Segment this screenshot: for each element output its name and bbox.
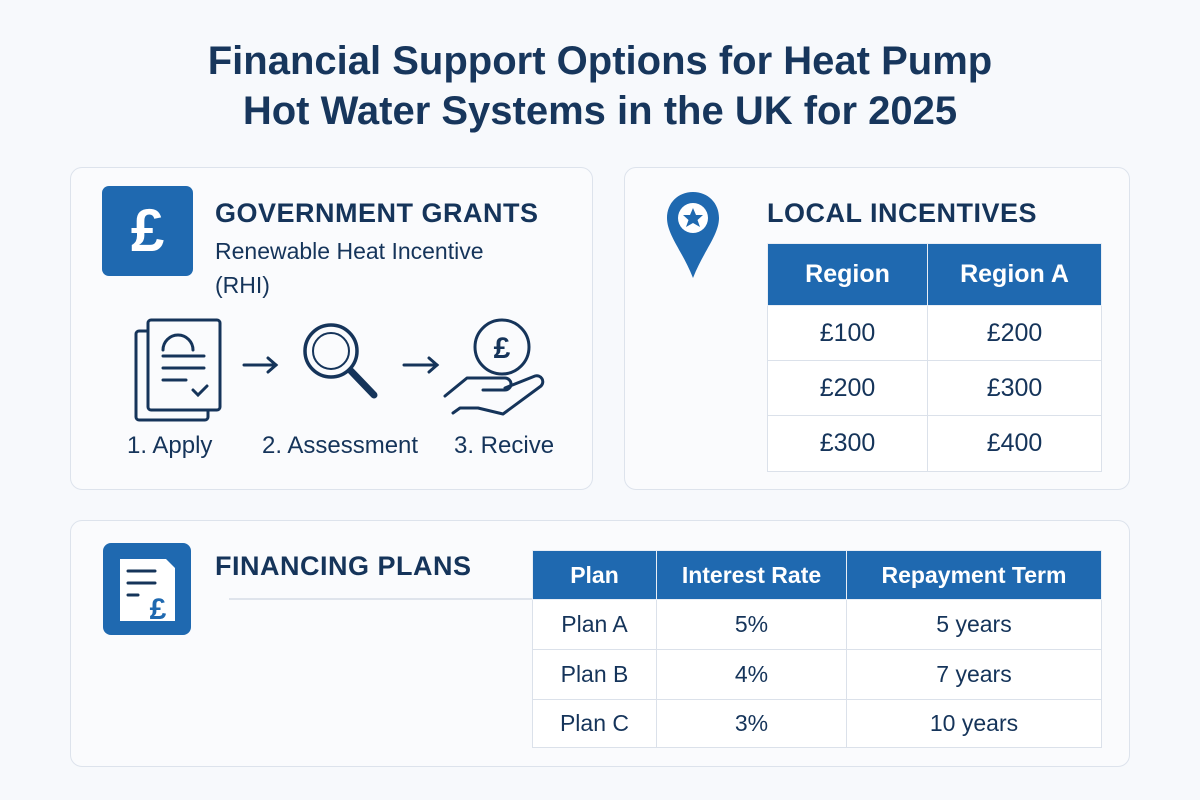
step labels: 1. Apply xyxy=(127,432,212,459)
table: plans: Plan C xyxy=(560,710,629,736)
table: regions xyxy=(767,243,1102,472)
icon: pound square: £ xyxy=(131,197,164,264)
table: plans: 4% xyxy=(735,661,768,687)
heading: government grants: GOVERNMENT GRANTS xyxy=(215,198,539,228)
table: regions: £300 xyxy=(987,374,1042,402)
table: regions: £100 xyxy=(820,318,875,346)
table: plans: Plan A xyxy=(561,611,628,637)
table: plans: Plan xyxy=(570,562,619,588)
icon: document xyxy=(136,320,220,420)
panel: local incentives xyxy=(624,167,1130,490)
table: plans: 5% xyxy=(735,611,768,637)
table: regions: Region A xyxy=(960,260,1069,288)
icon: pound square xyxy=(102,186,193,276)
table: plans: Plan B xyxy=(561,661,628,687)
table: regions: £200 xyxy=(820,374,875,402)
subtitle: Renewable Heat Incentive xyxy=(215,238,484,264)
table: plans xyxy=(532,550,1102,748)
icon: financing document xyxy=(103,543,191,635)
panel: government grants xyxy=(70,167,593,490)
process icons xyxy=(134,318,544,422)
table: plans: 3% xyxy=(735,710,768,736)
subtitle: (RHI) xyxy=(215,272,270,298)
title xyxy=(208,39,992,133)
arrow 1 xyxy=(244,358,276,372)
title: Hot Water Systems in the UK for 2025 xyxy=(243,89,957,133)
table: plans: 7 years xyxy=(936,661,1012,687)
icon: financing document: £ xyxy=(150,593,167,626)
icon: magnifier xyxy=(305,325,374,395)
arrow 2 xyxy=(404,358,437,372)
panel: financing plans xyxy=(70,520,1130,767)
panel: government grants: 3. Recive xyxy=(454,432,554,459)
table: regions: Region xyxy=(805,260,890,288)
table: regions: £400 xyxy=(987,429,1042,457)
heading: local incentives: LOCAL INCENTIVES xyxy=(767,198,1037,228)
title: Financial Support Options for Heat Pump xyxy=(208,39,992,83)
table: plans: 5 years xyxy=(936,611,1012,637)
table: regions: £200 xyxy=(987,318,1042,346)
icon: location pin xyxy=(667,192,719,278)
icon: hand with coin: £ xyxy=(494,332,511,365)
icon: hand with coin xyxy=(445,320,543,414)
table: plans: 10 years xyxy=(930,710,1018,736)
subtitle xyxy=(215,238,484,298)
panel: government grants: 2. Assessment xyxy=(262,432,418,459)
heading: financing plans: FINANCING PLANS xyxy=(215,551,472,581)
table: regions: £300 xyxy=(820,429,875,457)
table: plans: Interest Rate xyxy=(682,562,821,588)
table: plans: Repayment Term xyxy=(882,562,1066,588)
